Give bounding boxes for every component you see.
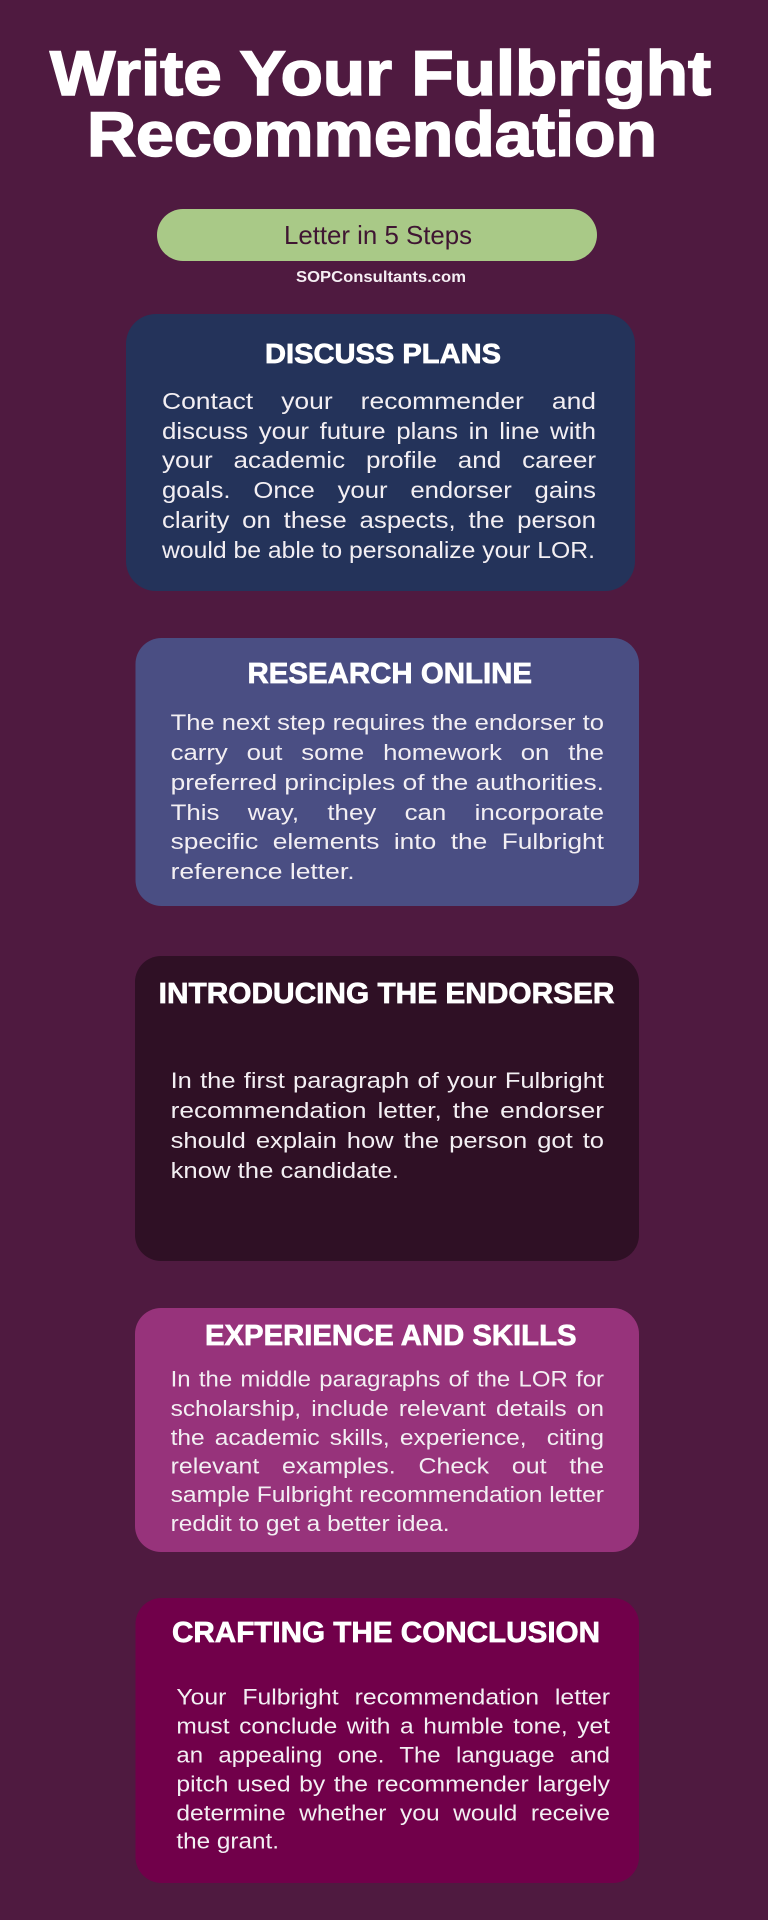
body text: research online	[171, 710, 604, 884]
subtitle pill	[157, 209, 597, 261]
panel: introducing the endorser	[135, 956, 639, 1261]
heading: research online: RESEARCH ONLINE	[248, 658, 532, 690]
body text: discuss plans: your academic profile and career	[162, 447, 596, 473]
body text: experience and skills: reddit to get a better idea.	[171, 1511, 450, 1536]
body text: crafting the conclusion: determine whether you would receive	[176, 1800, 610, 1826]
body text: research online: specific elements into the Fulbright	[171, 829, 604, 854]
body text: discuss plans: discuss your future plans in line with	[162, 418, 596, 444]
body text: experience and skills: sample Fulbright recommendation letter	[171, 1482, 604, 1507]
subtitle pill: Letter in 5 Steps	[284, 220, 472, 250]
panel: experience and skills	[135, 1308, 639, 1552]
body text: introducing the endorser: In the first paragraph of your Fulbright	[171, 1068, 604, 1093]
body text: experience and skills	[171, 1366, 604, 1536]
website credit: SOPConsultants.com	[296, 269, 466, 286]
body text: discuss plans: would be able to personalize your LOR.	[161, 537, 595, 563]
heading: crafting the conclusion: CRAFTING THE CONCLUSION	[172, 1617, 600, 1649]
heading: discuss plans: DISCUSS PLANS	[265, 338, 501, 369]
body text: experience and skills: scholarship, include relevant details on	[171, 1396, 604, 1421]
panel: discuss plans	[126, 314, 635, 591]
title	[50, 39, 711, 170]
title: Recommendation	[87, 100, 657, 170]
body text: experience and skills: the academic skills, experience, citing	[171, 1425, 604, 1450]
body text: discuss plans	[161, 388, 596, 563]
body text: introducing the endorser: should explain how the person got to	[171, 1128, 604, 1153]
body text: experience and skills: In the middle paragraphs of the LOR for	[171, 1366, 604, 1392]
body text: experience and skills: relevant examples. Check out the	[171, 1454, 604, 1478]
body text: research online: This way, they can incorporate	[171, 800, 604, 825]
body text: research online: preferred principles of the authorities.	[171, 770, 604, 795]
body text: introducing the endorser: recommendation letter, the endorser	[171, 1098, 604, 1123]
body text: discuss plans: clarity on these aspects, the person	[162, 507, 596, 533]
body text: introducing the endorser: know the candidate.	[171, 1158, 399, 1183]
body text: crafting the conclusion: must conclude with a humble tone, yet	[176, 1714, 610, 1738]
body text: crafting the conclusion: an appealing one. The language and	[176, 1742, 610, 1768]
body text: crafting the conclusion: the grant.	[176, 1828, 279, 1854]
body text: research online: carry out some homework on the	[171, 740, 604, 765]
body text: discuss plans: goals. Once your endorser gains	[162, 477, 596, 503]
heading: experience and skills: EXPERIENCE AND SKILLS	[205, 1320, 576, 1352]
body text: research online: The next step requires the endorser to	[171, 710, 604, 735]
heading: introducing the endorser: INTRODUCING THE ENDORSER	[159, 978, 615, 1010]
body text: crafting the conclusion: pitch used by the recommender largely	[176, 1772, 610, 1796]
body text: crafting the conclusion	[176, 1684, 610, 1854]
body text: discuss plans: Contact your recommender and	[162, 388, 596, 414]
panel: research online	[136, 638, 639, 906]
title: Write Your Fulbright	[50, 39, 711, 109]
body text: research online: reference letter.	[171, 859, 355, 884]
panel: crafting the conclusion	[136, 1598, 639, 1883]
body text: introducing the endorser	[171, 1068, 604, 1183]
body text: crafting the conclusion: Your Fulbright recommendation letter	[176, 1684, 610, 1710]
